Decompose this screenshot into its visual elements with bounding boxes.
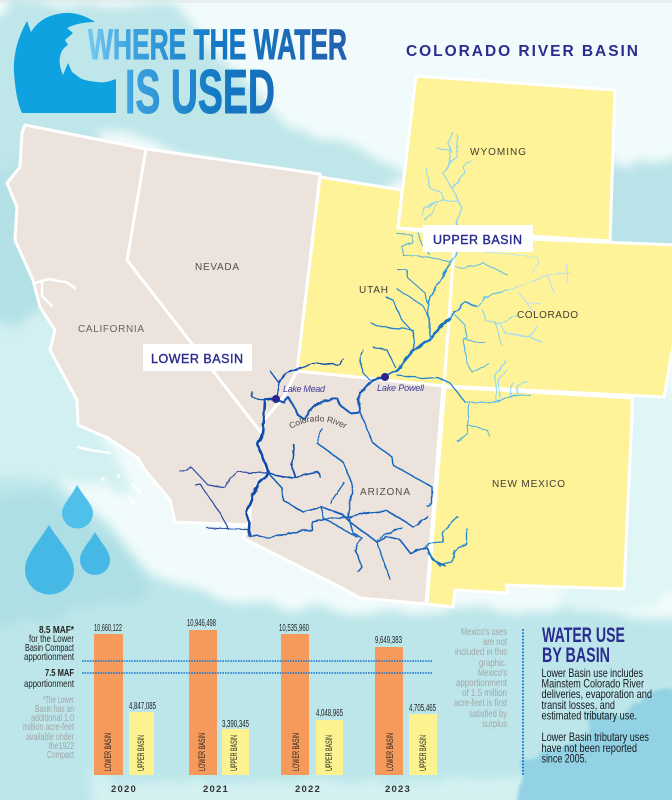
- bars 2021: 10,946,498: [187, 618, 216, 629]
- label: Lower Basin: [143, 344, 252, 371]
- apportionment labels: Basin Compact: [25, 642, 74, 654]
- label: Upper Basin: [423, 225, 533, 252]
- note: Mexico's uses: acre-feet is first: [454, 697, 507, 709]
- text block: water use description: since 2005.: [542, 752, 587, 766]
- bars 2022: LOWER BASIN: [291, 733, 302, 771]
- footnote: Lower Basin compact: Compact: [47, 749, 74, 761]
- Lake Mead marker: [272, 395, 280, 403]
- bars 2023: 2023: [385, 784, 411, 795]
- rivers: lower basin: [180, 359, 467, 579]
- label: Colorado River: Colorado River: [290, 415, 347, 428]
- label: Lake Mead: Lake Mead: [283, 384, 326, 394]
- divider: dotted vertical: [522, 629, 524, 775]
- label: Lower Basin: LOWER BASIN: [151, 352, 243, 366]
- text block: water use description: [542, 666, 652, 766]
- state: Wyoming: [398, 76, 615, 241]
- border: California and Nevada line: [127, 149, 262, 434]
- apportionment labels: for the Lower: [29, 633, 74, 645]
- rivers: upper basin: [360, 132, 570, 442]
- state: New Mexico: [427, 387, 632, 607]
- bars 2020: 4,847,085: [129, 701, 156, 712]
- bars 2020: LOWER BASIN: [103, 733, 114, 771]
- heading: Colorado River Basin: COLORADO RIVER BASIN: [406, 43, 638, 60]
- state labels: COLORADO: [517, 310, 578, 321]
- heading: Water Use by Basin: WATER USE: [542, 624, 625, 647]
- note: Mexico's uses: apportionment: [456, 677, 507, 689]
- bars 2020: [94, 623, 156, 795]
- state: Colorado: [444, 236, 672, 397]
- note: Mexico's uses: of 1.5 million: [462, 687, 507, 699]
- text block: water use description: have not been reported: [542, 741, 637, 755]
- bars 2020: UPPER BASIN: [136, 735, 147, 771]
- bars 2021: UPPER BASIN: [229, 735, 240, 771]
- title: IS USED: [125, 58, 275, 127]
- note: Mexico's uses: included in this: [455, 646, 507, 658]
- state: Utah: [297, 177, 455, 386]
- state labels: WYOMING: [470, 147, 526, 158]
- state: California and Nevada: [7, 125, 320, 525]
- Lake Powell marker: [381, 373, 389, 381]
- footnote: Lower Basin compact: the1922: [49, 740, 74, 752]
- bars 2023: 9,649,383: [375, 635, 402, 646]
- icon: water drops: [25, 485, 110, 594]
- bars 2022: [279, 623, 343, 795]
- state labels: NEW MEXICO: [492, 479, 565, 490]
- state labels: NEVADA: [195, 262, 239, 273]
- reference lines: 8.5 and 7.5 MAF: [82, 661, 432, 673]
- state labels: CALIFORNIA: [78, 324, 144, 335]
- title: [88, 21, 347, 127]
- bars 2021: [187, 618, 249, 795]
- bars 2020: 2020: [111, 784, 137, 795]
- icon: wave logo: [14, 13, 116, 113]
- heading: Water Use by Basin: [542, 624, 625, 667]
- bars 2022: 4,048,965: [316, 708, 343, 719]
- footnote: Lower Basin compact: [23, 694, 74, 761]
- bars 2023: 4,705,465: [409, 703, 436, 714]
- apportionment labels: apportionment: [24, 678, 74, 690]
- footnote: Lower Basin compact: available under: [26, 731, 74, 743]
- note: Mexico's uses: are not: [483, 636, 507, 648]
- bars 2022: 2022: [295, 784, 321, 795]
- bars 2022: 10,535,960: [279, 623, 309, 634]
- map: [7, 76, 672, 607]
- bars 2020: 10,660,122: [94, 623, 122, 634]
- text block: water use description: estimated tributary use.: [542, 708, 637, 722]
- apportionment labels: 7.5 MAF: [45, 667, 74, 679]
- bars 2021: 3,390,345: [222, 719, 249, 730]
- bars 2021: LOWER BASIN: [197, 733, 208, 771]
- note: Mexico's uses: graphic.: [479, 657, 507, 669]
- text block: water use description: transit losses, and: [542, 698, 615, 712]
- state labels: UTAH: [359, 285, 388, 296]
- bars 2023: [375, 635, 437, 795]
- apportionment labels: 8.5 MAF*: [39, 624, 75, 636]
- note: Mexico's uses: [454, 626, 508, 730]
- label: Upper Basin: UPPER BASIN: [433, 233, 522, 247]
- heading: Water Use by Basin: BY BASIN: [542, 644, 610, 667]
- note: Mexico's uses: surplus: [482, 718, 507, 730]
- note: Mexico's uses: satisfied by: [469, 708, 508, 720]
- label: Lake Powell: Lake Powell: [377, 383, 425, 393]
- lower-right wave wash: [520, 690, 672, 800]
- footnote: Lower Basin compact: Basin has an: [35, 703, 74, 715]
- bars 2023: LOWER BASIN: [385, 733, 396, 771]
- apportionment labels: [24, 624, 75, 690]
- footnote: Lower Basin compact: additional 1.0: [31, 712, 74, 724]
- state labels: [78, 147, 578, 498]
- apportionment labels: apportionment: [24, 651, 74, 663]
- state: Arizona: [243, 371, 443, 604]
- bay and islands: [35, 279, 140, 505]
- note: Mexico's uses: Mexico's: [478, 667, 507, 679]
- footnote: Lower Basin compact: million acre-feet: [23, 721, 74, 733]
- bars 2021: 2021: [203, 784, 229, 795]
- state labels: ARIZONA: [360, 487, 410, 498]
- note: Mexico's uses: Mexico's uses: [461, 626, 507, 638]
- bars 2022: UPPER BASIN: [324, 735, 335, 771]
- bar chart: [82, 618, 437, 795]
- bars 2023: UPPER BASIN: [418, 735, 429, 771]
- footnote: Lower Basin compact: *The Lower: [43, 694, 74, 706]
- title: WHERE THE WATER: [88, 21, 347, 69]
